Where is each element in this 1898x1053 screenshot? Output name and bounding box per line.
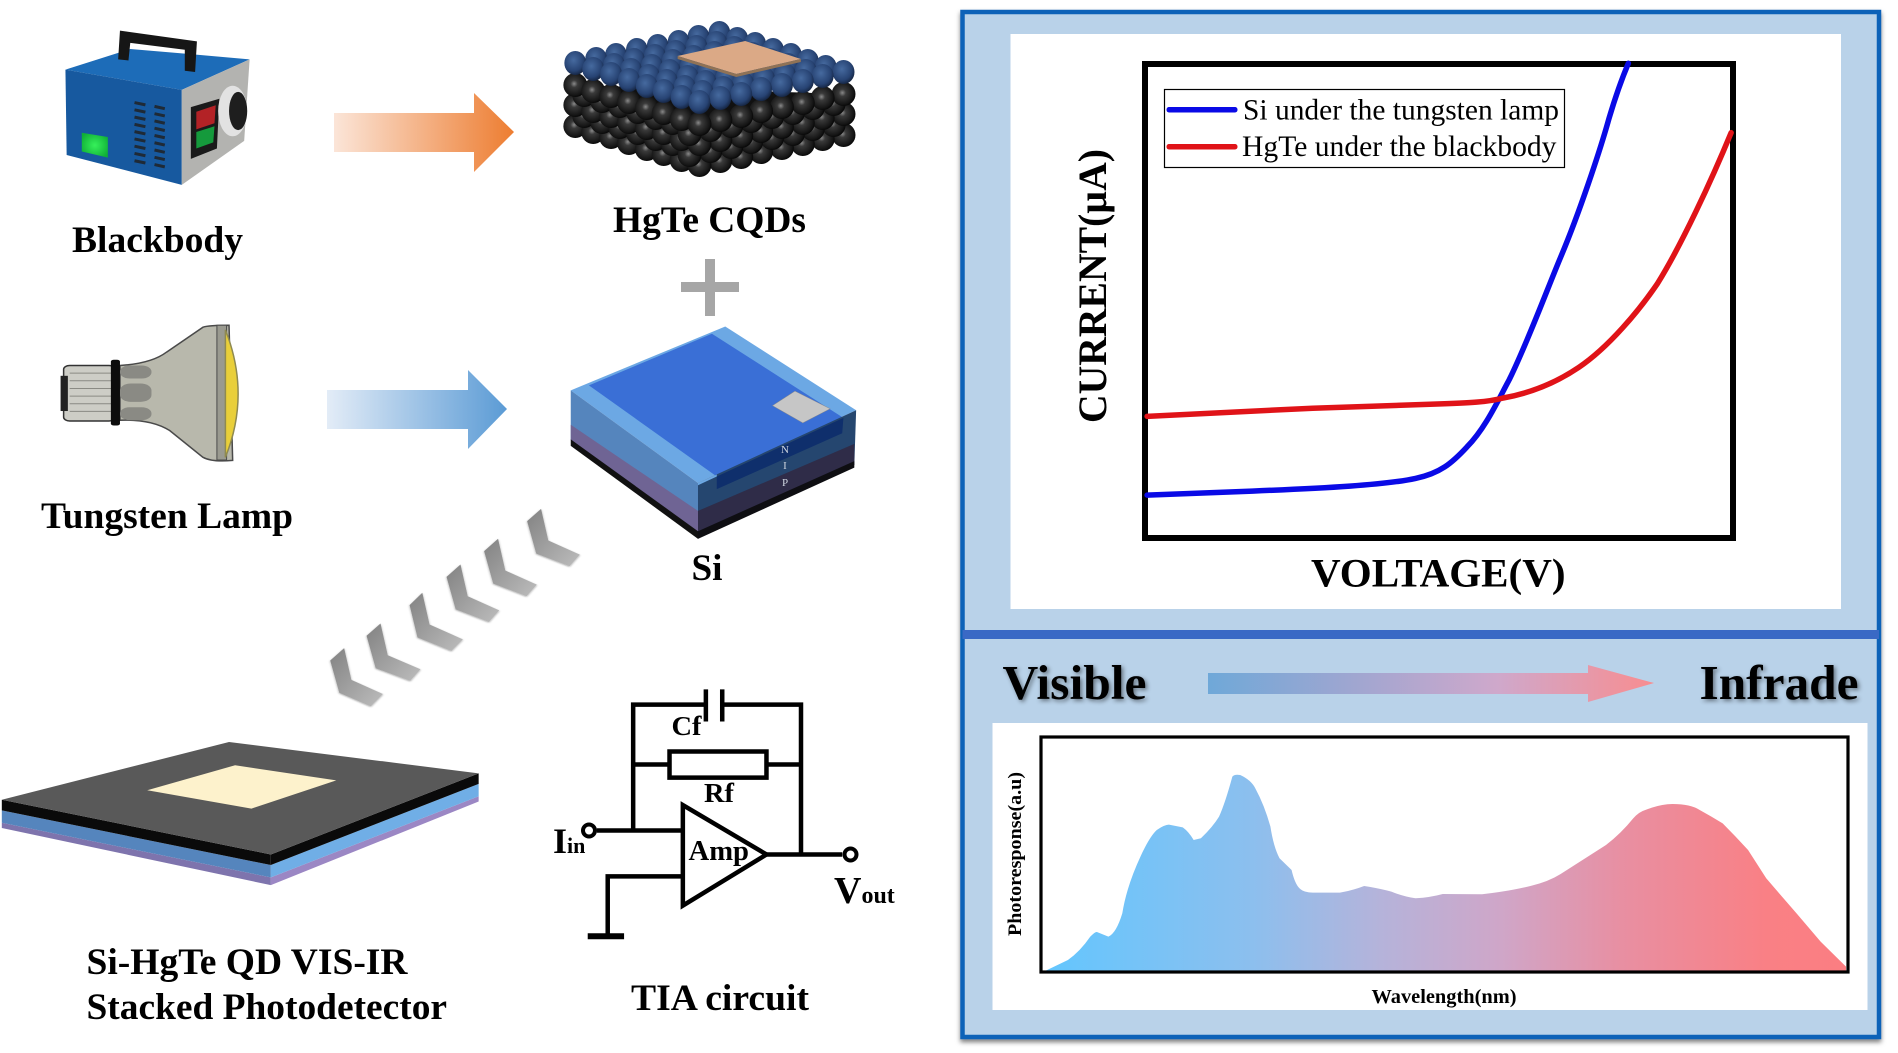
heading: Visible: Visible	[1002, 655, 1146, 710]
label: N I P layer letters: I	[783, 460, 787, 472]
icon: Si PIN block	[571, 326, 856, 539]
icon: HgTe CQD sphere stack	[563, 21, 855, 177]
axis label: wavelength: Wavelength(nm)	[1372, 986, 1516, 1008]
legend: Si under the tungsten lamp	[1243, 94, 1559, 126]
arrow: chevrons	[330, 509, 580, 706]
label: device name: Stacked Photodetector	[86, 987, 447, 1028]
label: Blackbody: Blackbody	[72, 220, 243, 261]
legend	[1164, 90, 1564, 168]
arrow: visible to infrared	[1208, 665, 1654, 702]
axis label: current: CURRENT(µA)	[1070, 149, 1115, 423]
diagram: TIA circuit: Iin	[553, 821, 585, 861]
label: TIA circuit: TIA circuit	[631, 978, 810, 1019]
label: Tungsten Lamp: Tungsten Lamp	[41, 496, 293, 537]
diagram: TIA circuit: Vout	[834, 870, 895, 912]
label: N I P layer letters: P	[782, 477, 788, 489]
label: device name	[86, 942, 447, 1028]
icon: plus sign	[681, 259, 739, 316]
diagram: TIA circuit: Rf	[704, 778, 735, 808]
diagram: TIA circuit: Cf	[672, 711, 703, 741]
icon: blackbody furnace	[65, 31, 250, 185]
curve: Si and HgTe	[1147, 63, 1731, 495]
diagram: TIA circuit	[553, 689, 895, 936]
arrow: orange	[334, 93, 514, 172]
heading: Infrade: Infrade	[1700, 655, 1858, 710]
arrow: blue	[327, 370, 507, 449]
panel: right results frame	[962, 12, 1879, 1037]
legend: HgTe under the blackbody	[1242, 130, 1556, 163]
diagram: TIA circuit: Amp	[688, 835, 749, 867]
label: device name: Si-HgTe QD VIS-IR	[86, 942, 409, 983]
icon: tungsten lamp	[61, 325, 238, 461]
spectrum area	[1044, 775, 1846, 972]
panel: photoresponse spectrum	[992, 723, 1868, 1010]
axis label: voltage: VOLTAGE(V)	[1311, 550, 1566, 596]
label: N I P layer letters: N	[781, 444, 789, 456]
icon: stacked photodetector	[2, 742, 479, 885]
label: HgTe CQDs: HgTe CQDs	[613, 200, 806, 241]
label: N I P layer letters	[781, 444, 789, 489]
label: Si: Si	[692, 548, 722, 589]
axis label: photoresponse: Photoresponse(a.u)	[1006, 772, 1026, 936]
panel: I-V chart	[1010, 34, 1841, 609]
